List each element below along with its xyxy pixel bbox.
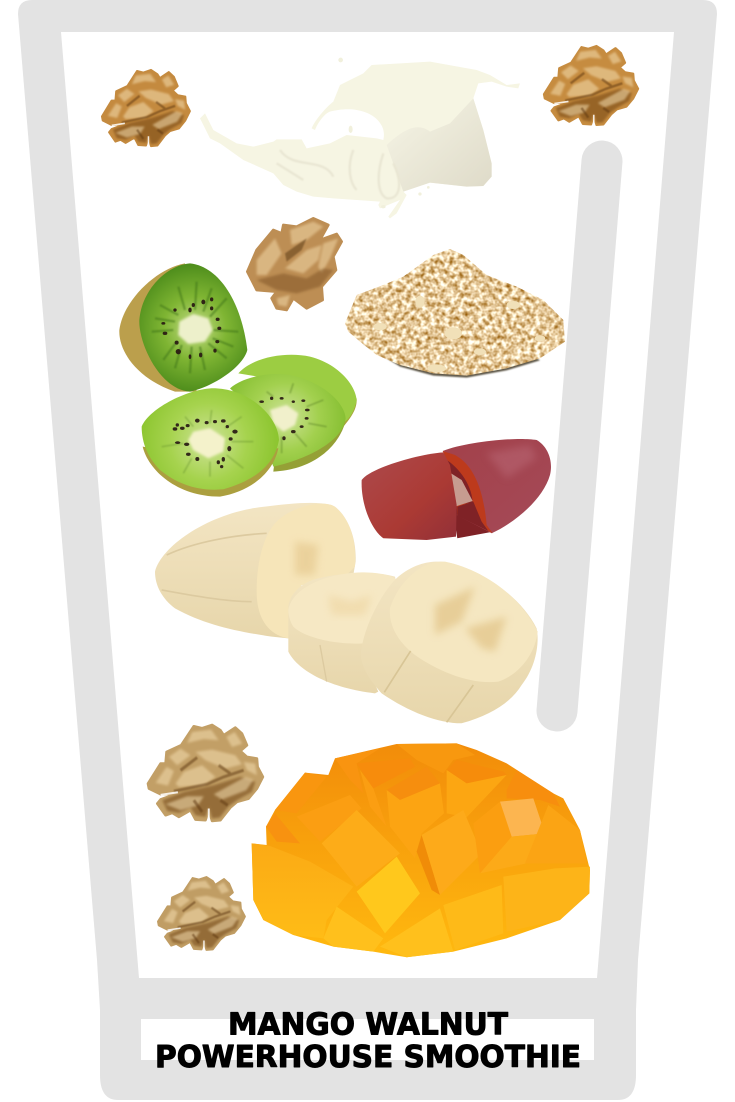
banana: long piece [155,503,356,638]
walnut: lower bottom [158,877,245,951]
mango: yellow front cube [357,857,420,933]
date fruit [362,439,551,540]
title: MANGO WALNUT [228,1008,509,1042]
walnut: top left [102,70,190,147]
date: left half [362,452,457,540]
title: POWERHOUSE SMOOTHIE [155,1040,581,1075]
title [155,1008,581,1075]
walnut: top right [544,46,638,126]
oats pile [345,249,565,378]
mango: middle cubes [297,795,587,895]
banana: front slice [361,562,538,723]
kiwi front slice [142,388,279,497]
banana pieces [155,503,538,723]
glass highlight [557,161,602,711]
kiwi group [119,218,357,497]
kiwi middle slice [230,374,346,472]
mango: front wedges [252,843,590,957]
walnut: centre [247,218,342,310]
kiwi half [119,263,247,392]
banana: middle slice [288,572,397,693]
kiwi back slice [238,355,357,427]
mango hedgehog [252,743,590,957]
milk splash [200,58,520,218]
mango: back cubes [266,743,560,858]
date: right half [443,439,551,538]
walnut: lower upper [148,725,263,822]
